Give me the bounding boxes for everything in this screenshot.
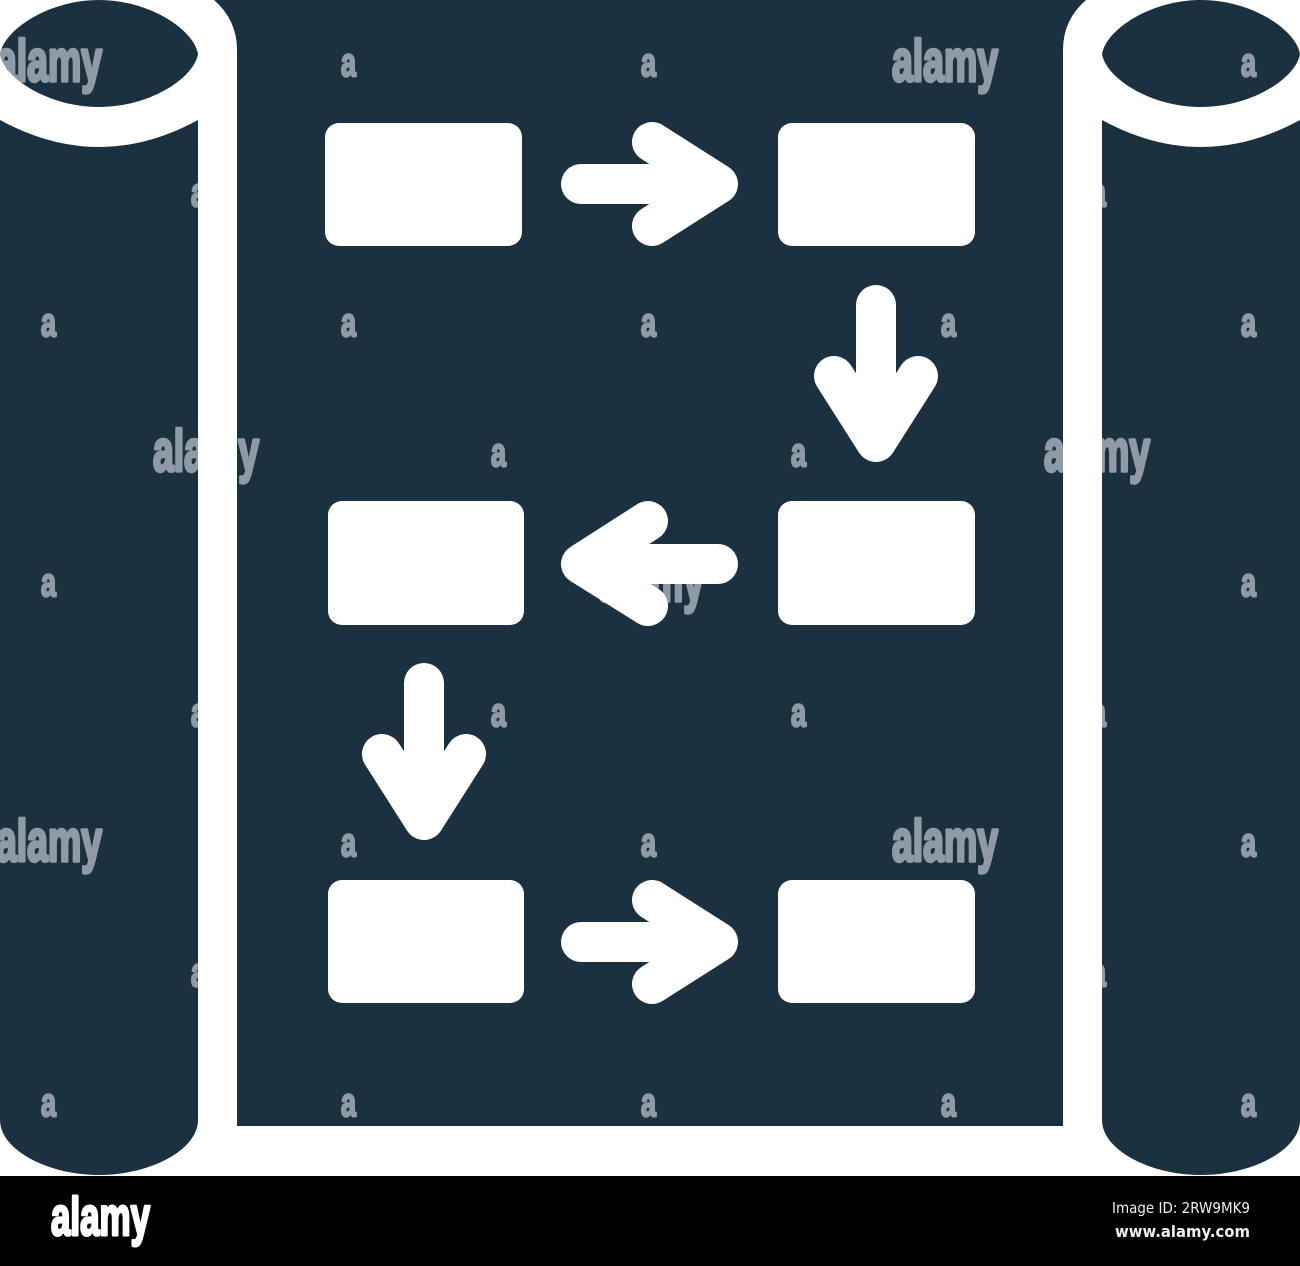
footer logo: alamy bbox=[51, 1187, 150, 1247]
watermark pattern: alamy bbox=[1044, 419, 1150, 484]
watermark pattern: a bbox=[641, 1081, 657, 1125]
watermark pattern: a bbox=[191, 951, 207, 995]
watermark pattern: alamy bbox=[892, 29, 998, 94]
right paper roll bbox=[1102, 0, 1300, 1175]
flow box 5 bbox=[328, 880, 524, 1003]
watermark pattern: a bbox=[491, 431, 507, 475]
watermark pattern: a bbox=[341, 821, 357, 865]
flow box 2 bbox=[778, 123, 975, 246]
watermark pattern: alamy bbox=[892, 809, 998, 874]
watermark pattern: a bbox=[1091, 691, 1107, 735]
watermark pattern: a bbox=[1241, 821, 1257, 865]
watermark pattern: a bbox=[1241, 301, 1257, 345]
watermark pattern: alamy bbox=[153, 419, 259, 484]
watermark pattern: a bbox=[641, 301, 657, 345]
flow box 6 bbox=[778, 880, 975, 1003]
arrow: right, box 5 to box 6 bbox=[581, 900, 718, 984]
watermark pattern: a bbox=[941, 301, 957, 345]
watermark pattern: alamy bbox=[0, 809, 102, 874]
unrolled paper sheet bbox=[214, 0, 1086, 1126]
watermark pattern: a bbox=[41, 301, 57, 345]
flow box 1 bbox=[325, 123, 522, 246]
flow box 3 bbox=[778, 501, 975, 625]
watermark pattern: a bbox=[941, 561, 957, 605]
image id: Image ID: 2RW9MK9 bbox=[1112, 1199, 1250, 1217]
arrow: left, box 3 to box 4 bbox=[581, 521, 718, 606]
watermark pattern: a bbox=[1091, 951, 1107, 995]
watermark pattern: alamy bbox=[598, 549, 704, 614]
watermark pattern: a bbox=[41, 1081, 57, 1125]
watermark pattern: a bbox=[791, 691, 807, 735]
watermark pattern: a bbox=[1241, 561, 1257, 605]
watermark pattern: a bbox=[41, 561, 57, 605]
watermark pattern: a bbox=[341, 1081, 357, 1125]
watermark pattern: a bbox=[1241, 41, 1257, 85]
watermark pattern: a bbox=[1241, 1081, 1257, 1125]
watermark pattern: alamy bbox=[0, 29, 102, 94]
watermark pattern: a bbox=[641, 41, 657, 85]
left paper roll bbox=[0, 0, 198, 1175]
watermark pattern: a bbox=[941, 1081, 957, 1125]
arrow: right, box 1 to box 2 bbox=[581, 142, 718, 226]
watermark pattern: a bbox=[341, 301, 357, 345]
arrow: down, box 4 to box 5 bbox=[382, 683, 466, 820]
watermark pattern: a bbox=[491, 691, 507, 735]
footer bar bbox=[0, 1176, 1300, 1266]
watermark pattern: a bbox=[341, 41, 357, 85]
watermark pattern: a bbox=[791, 431, 807, 475]
arrow: down, box 2 to box 3 bbox=[834, 305, 918, 442]
flow box 4 bbox=[328, 501, 524, 625]
watermark pattern: a bbox=[191, 171, 207, 215]
watermark pattern: a bbox=[191, 691, 207, 735]
watermark pattern: a bbox=[1091, 171, 1107, 215]
watermark pattern: a bbox=[641, 821, 657, 865]
website: www.alamy.com bbox=[1115, 1222, 1250, 1241]
watermark pattern: a bbox=[341, 561, 357, 605]
